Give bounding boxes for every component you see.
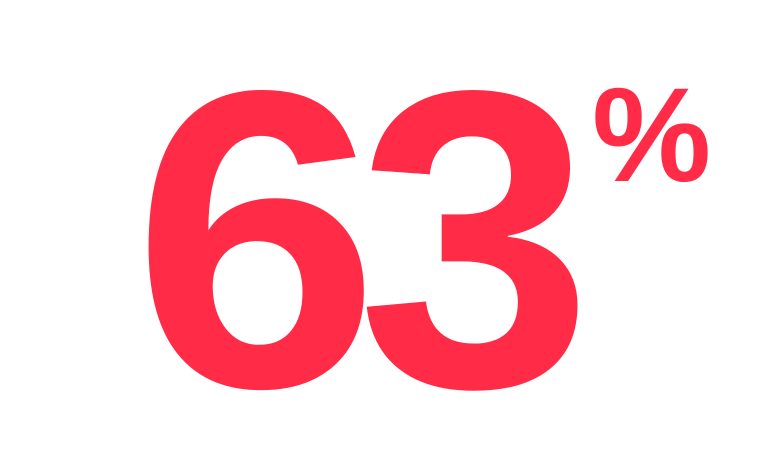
numeral 6: 6 bbox=[132, 3, 380, 476]
numeral 3: 3 bbox=[357, 2, 593, 476]
percent sign: % bbox=[592, 61, 711, 210]
